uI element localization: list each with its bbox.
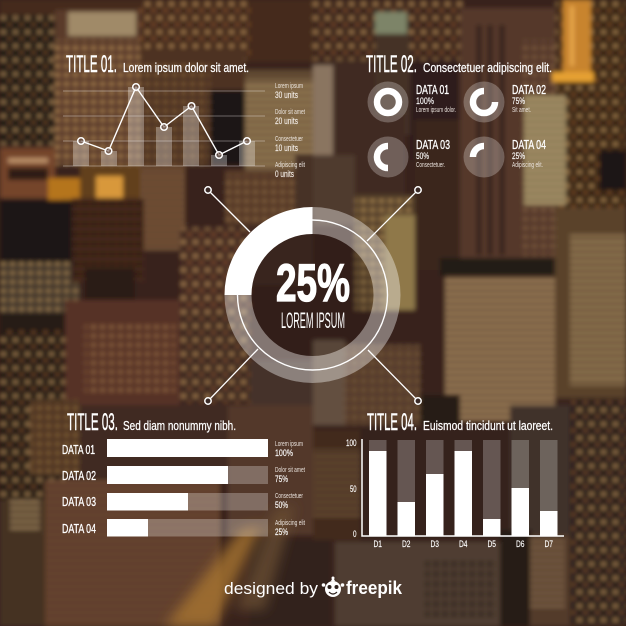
column chart: D1 — [374, 539, 382, 550]
bar legend — [275, 441, 305, 538]
bar legend: 75% — [275, 474, 288, 485]
column chart: D3 — [430, 539, 439, 550]
title 04: TITLE 04. — [367, 409, 417, 436]
text: data 03: 50% — [416, 151, 429, 162]
text: data 03 — [416, 138, 450, 169]
title 01 — [66, 51, 249, 78]
bar legend: Dolor sit amet — [275, 467, 305, 474]
central donut chart: LOREM IPSUM — [281, 308, 345, 333]
column chart — [346, 438, 564, 550]
ring: data 02 — [464, 82, 504, 122]
column chart: 0 — [353, 529, 356, 540]
connector lines with nodes — [205, 187, 421, 404]
column chart: D7 — [544, 539, 553, 550]
text: data 04: DATA 04 — [512, 138, 546, 152]
title 03: TITLE 03. — [67, 409, 118, 436]
text: data 02: DATA 02 — [512, 83, 546, 97]
panel: column chart section — [346, 409, 564, 550]
chart legend: 10 units — [275, 143, 298, 154]
chart legend: 30 units — [275, 90, 298, 101]
title 02: Consectetuer adipiscing elit. — [423, 60, 552, 75]
title 02: TITLE 02. — [366, 51, 417, 78]
ring: data 01 — [368, 82, 408, 122]
chart legend — [275, 83, 305, 180]
title 03: Sed diam nonummy nibh. — [123, 418, 236, 433]
chart legend: 20 units — [275, 116, 298, 127]
ring: data 03 — [368, 136, 408, 178]
text: data 01: 100% — [416, 96, 434, 107]
text: data 03: Consectetuer. — [416, 162, 445, 169]
chart legend: Dolor sit amet — [275, 109, 305, 116]
text: data 01: Lorem ipsum dolor. — [416, 107, 456, 114]
footer credit: designed by — [224, 579, 319, 598]
title 01: Lorem ipsum dolor sit amet. — [123, 60, 249, 75]
text: data 02: Sit amet. — [512, 107, 531, 114]
line chart with bars — [63, 84, 265, 166]
title 03 — [67, 409, 236, 436]
big percentage: 25% — [276, 254, 350, 313]
chart legend: Consectetuer — [275, 136, 303, 143]
bar legend: 100% — [275, 448, 293, 459]
background: street glow — [165, 505, 295, 626]
ring: data 04 — [464, 136, 504, 178]
column chart: 50 — [350, 484, 356, 495]
title 02 — [366, 51, 552, 78]
horizontal bar chart: DATA 02 — [62, 469, 96, 483]
bar legend: Adipiscing elit — [275, 520, 305, 527]
horizontal bar chart: DATA 04 — [62, 522, 96, 536]
panel: horizontal bars section — [62, 409, 305, 538]
panel: line chart section — [63, 51, 305, 180]
horizontal bar chart: DATA 01 — [62, 443, 95, 457]
text: data 02: 75% — [512, 96, 525, 107]
text: data 04: 25% — [512, 151, 525, 162]
text: data 02 — [512, 83, 546, 114]
icon: freepik mascot — [322, 576, 344, 597]
bar legend: 25% — [275, 527, 288, 538]
title 04: Euismod tincidunt ut laoreet. — [423, 418, 553, 433]
text: data 01 — [416, 83, 456, 114]
central donut chart — [205, 187, 421, 404]
column chart: D4 — [459, 539, 468, 550]
chart legend: 0 units — [275, 169, 294, 180]
bar legend: 50% — [275, 500, 288, 511]
chart legend: Lorem ipsum — [275, 83, 303, 90]
horizontal bar chart — [62, 439, 268, 536]
text: data 03: DATA 03 — [416, 138, 450, 152]
bar legend: Consectetuer — [275, 493, 303, 500]
bar legend: Lorem ipsum — [275, 441, 303, 448]
column chart: 100 — [346, 438, 356, 449]
column chart: D2 — [402, 539, 410, 550]
panel: ring stats section — [366, 51, 552, 178]
column chart: D5 — [488, 539, 496, 550]
horizontal bar chart: DATA 03 — [62, 495, 96, 509]
column chart: D6 — [516, 539, 524, 550]
text: data 01: DATA 01 — [416, 83, 449, 97]
footer credit: freepik — [346, 578, 403, 598]
title 01: TITLE 01. — [66, 51, 117, 78]
text: data 04 — [512, 138, 546, 169]
chart legend: Adipiscing elit — [275, 162, 305, 169]
text: data 04: Adipiscing elit. — [512, 162, 543, 169]
footer credit — [224, 576, 403, 598]
title 04 — [367, 409, 553, 436]
